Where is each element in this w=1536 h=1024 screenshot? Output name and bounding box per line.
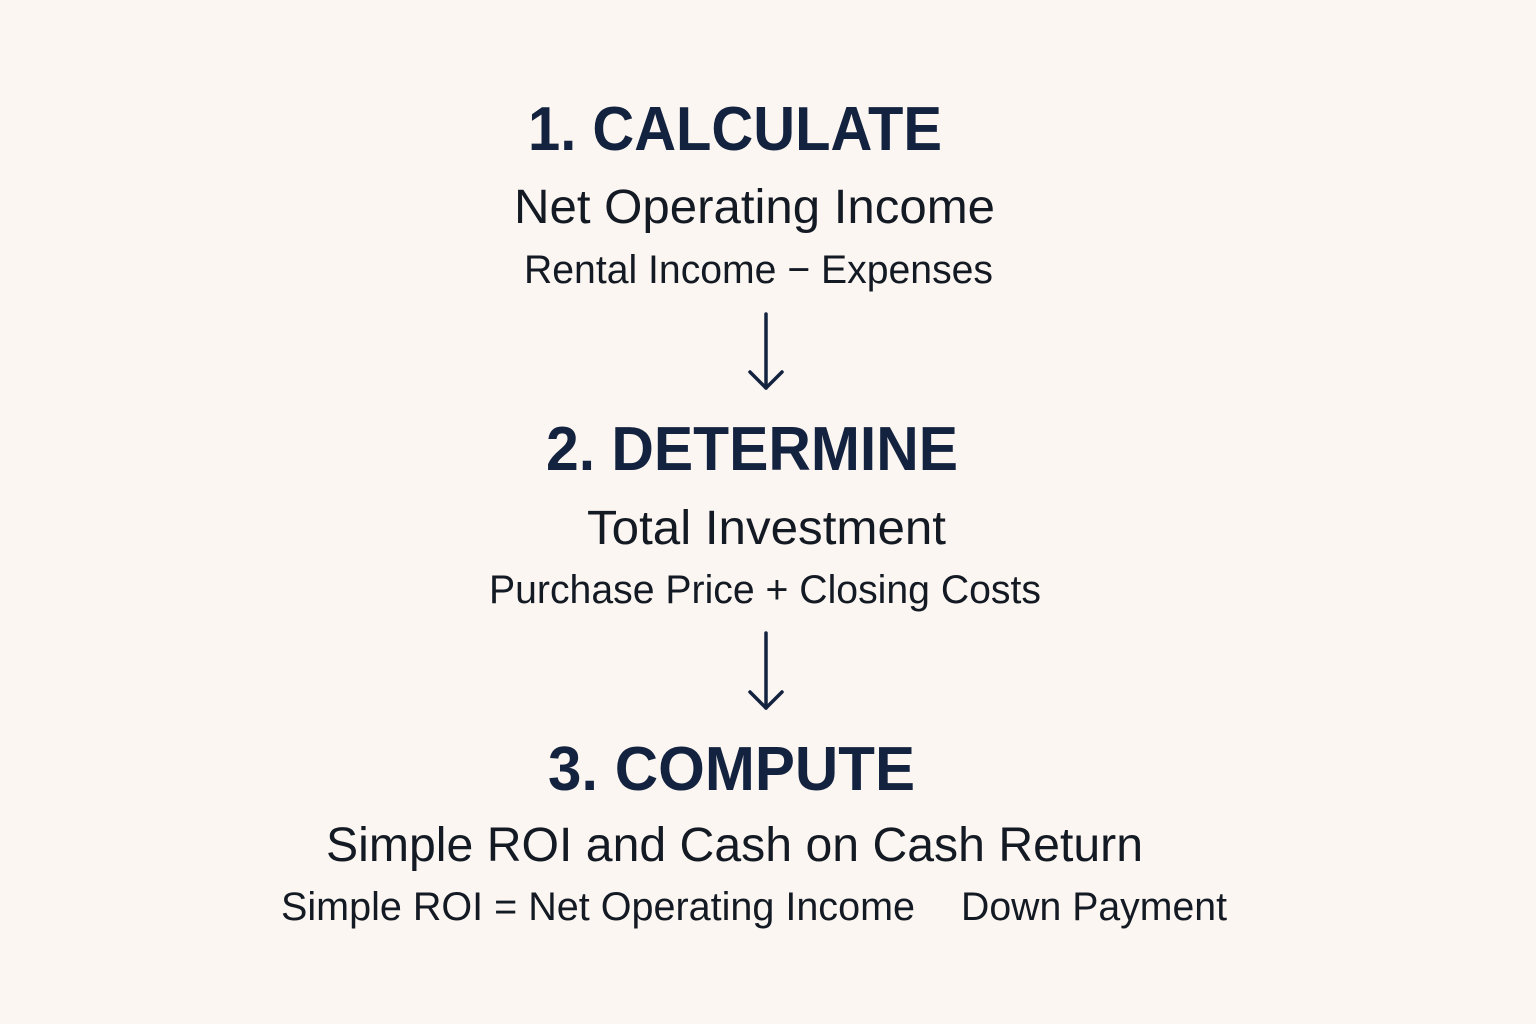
step 1 heading: 1. CALCULATE bbox=[528, 95, 942, 164]
step 3 formula: Down Payment bbox=[961, 885, 1227, 929]
step 2 heading: 2. DETERMINE bbox=[546, 415, 958, 484]
arrow 1 bbox=[750, 314, 782, 388]
step 2 formula: Purchase Price + Closing Costs bbox=[489, 568, 1041, 612]
step 3 heading: 3. COMPUTE bbox=[548, 735, 915, 804]
step 3 formula: Simple ROI = Net Operating Income bbox=[281, 885, 915, 929]
step 1 formula: Rental Income − Expenses bbox=[524, 248, 993, 292]
step 3 subtitle: Simple ROI and Cash on Cash Return bbox=[326, 819, 1143, 872]
arrow 2 bbox=[750, 633, 782, 708]
step 2 subtitle: Total Investment bbox=[587, 502, 946, 555]
step 3 formula bbox=[281, 885, 1227, 929]
step 1 subtitle: Net Operating Income bbox=[514, 181, 995, 234]
